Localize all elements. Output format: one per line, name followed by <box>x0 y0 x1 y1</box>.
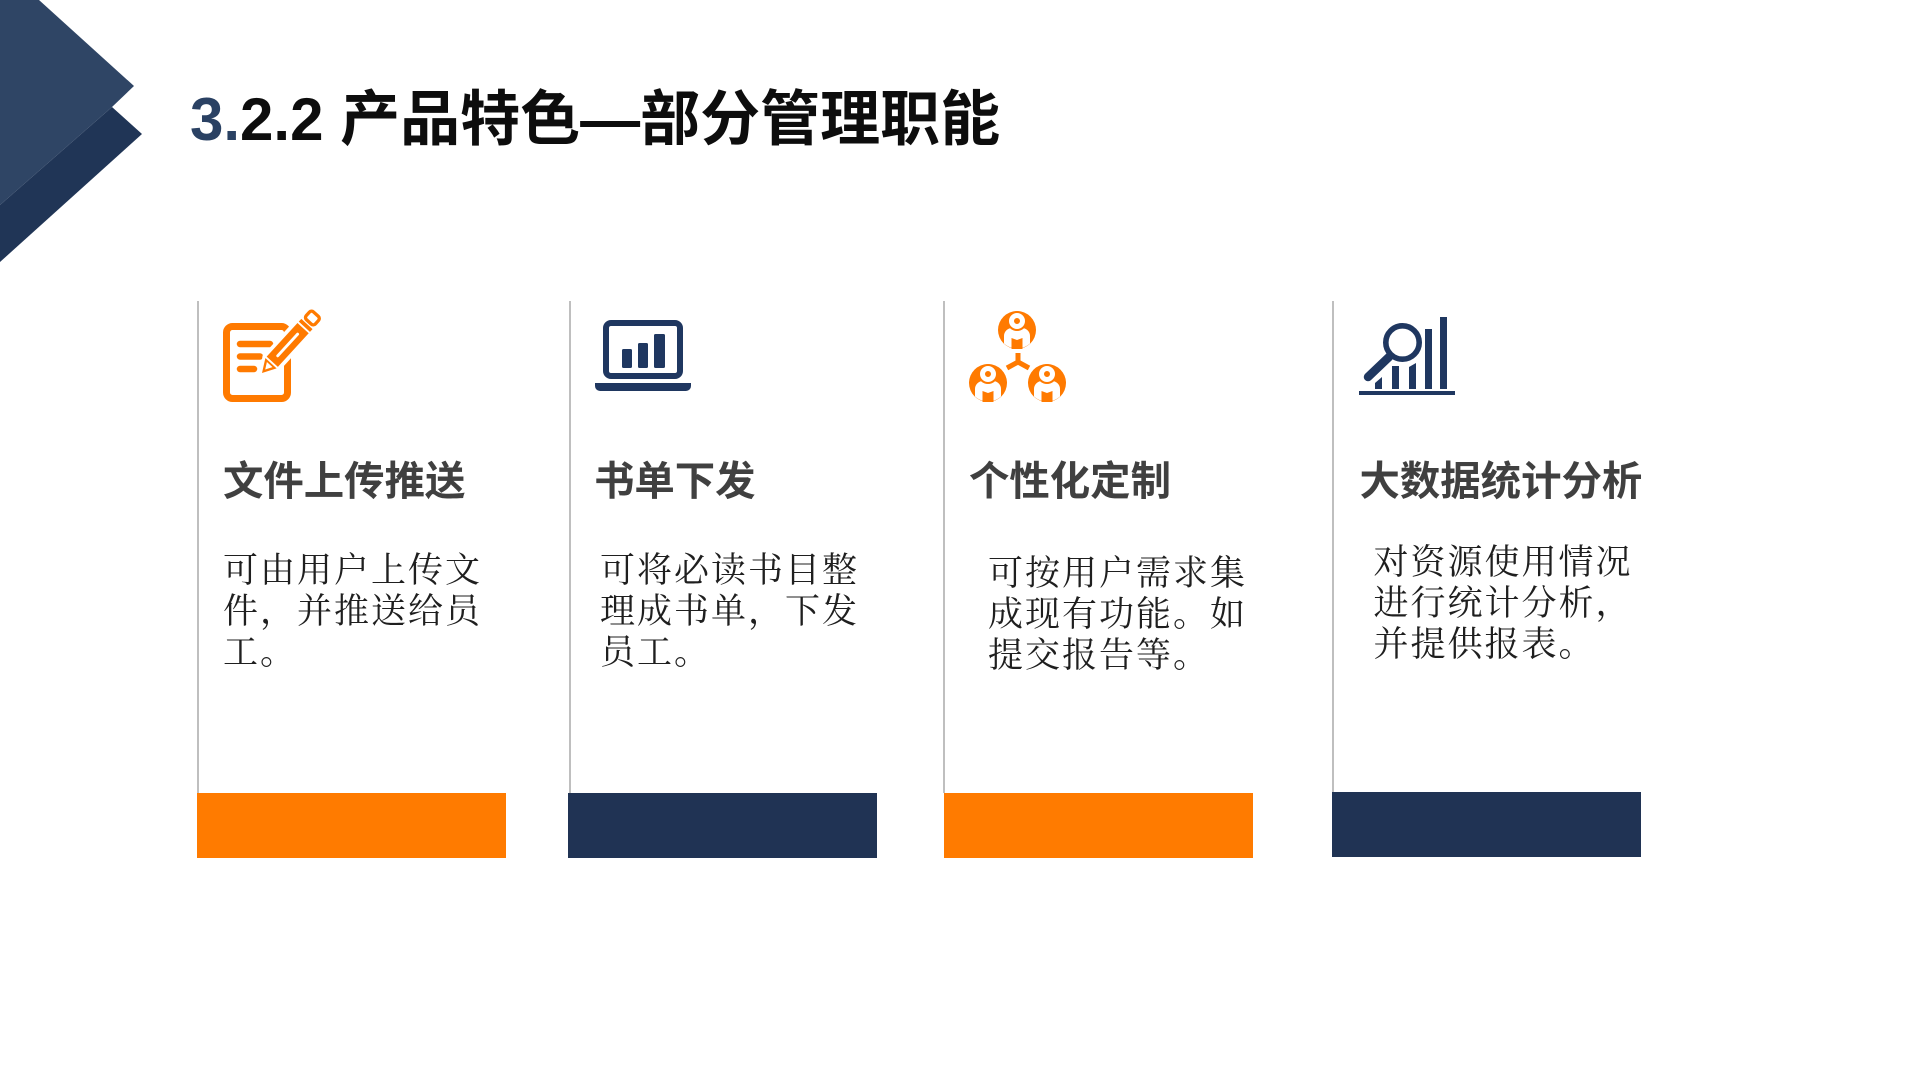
body text: 进行统计分析， <box>1374 584 1633 622</box>
bar <box>197 793 506 858</box>
body text <box>1374 542 1633 664</box>
panel: customization <box>943 301 1253 858</box>
body text <box>988 554 1247 675</box>
panel: data analytics <box>1332 301 1642 857</box>
panel: file upload <box>197 301 506 858</box>
icon: document and pencil <box>223 310 321 402</box>
body text: 员工。 <box>600 633 711 672</box>
corner chevrons <box>0 0 142 262</box>
body text <box>223 551 482 672</box>
bar <box>944 793 1253 858</box>
body text: 提交报告等。 <box>988 636 1210 675</box>
body text: 并提供报表。 <box>1374 624 1596 664</box>
icon: laptop chart <box>595 320 691 391</box>
icon: connected users <box>969 311 1066 402</box>
heading: 个性化定制 <box>969 458 1171 504</box>
body text: 可由用户上传文 <box>223 551 482 590</box>
bar <box>1332 792 1641 857</box>
body text: 工。 <box>223 633 297 672</box>
body text: 可将必读书目整 <box>600 551 859 590</box>
body text <box>600 551 859 672</box>
body text: 对资源使用情况 <box>1374 542 1633 582</box>
body text: 成现有功能。如 <box>988 595 1247 634</box>
icon: magnifier and bars <box>1359 317 1455 395</box>
body text: 可按用户需求集 <box>988 554 1247 593</box>
body text: 件，并推送给员 <box>223 592 482 631</box>
bar <box>568 793 877 858</box>
heading: 大数据统计分析 <box>1360 458 1642 504</box>
panel: book list <box>568 301 877 858</box>
heading: 书单下发 <box>594 458 756 504</box>
body text: 理成书单，下发 <box>600 592 859 631</box>
title: 3.2.2 产品特色—部分管理职能 <box>190 86 1000 153</box>
heading: 文件上传推送 <box>223 458 465 504</box>
